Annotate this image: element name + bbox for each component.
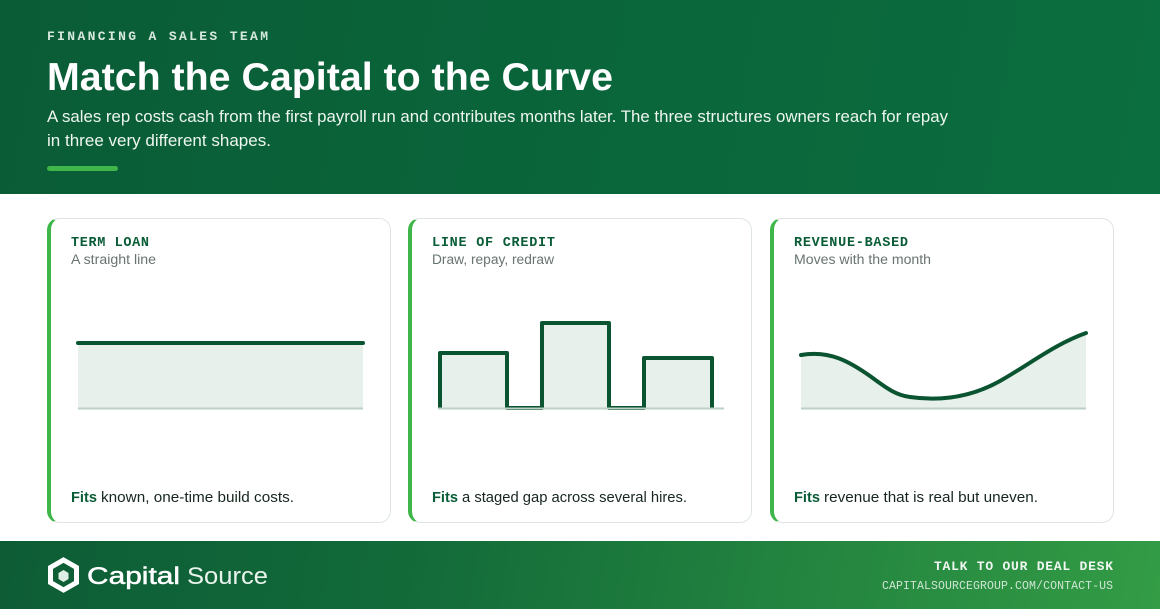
logo wordmark: Capital: [87, 563, 180, 590]
subtitle: A sales rep costs cash from the first payroll run and contributes months later. The three structures owners reach for repay: [47, 107, 948, 126]
card heading: TERM LOAN: [71, 236, 149, 251]
panel: term loan: [47, 218, 391, 523]
logo wordmark: [87, 563, 268, 590]
header band: [0, 0, 1160, 194]
title: Match the Capital to the Curve: [47, 56, 613, 99]
subtitle: [47, 107, 948, 150]
chart: revenue-linked curve: [801, 333, 1086, 408]
fit note: a staged gap across several hires.: [462, 490, 687, 506]
logo wordmark: Source: [187, 563, 268, 590]
card heading: LINE OF CREDIT: [432, 236, 555, 251]
icon: hexagon logo: [50, 560, 76, 590]
footer band: [0, 541, 1160, 609]
card subheading: Moves with the month: [794, 252, 931, 267]
eyebrow: FINANCING A SALES TEAM: [47, 29, 268, 44]
fit note: Fits: [794, 490, 820, 506]
panel: line of credit: [408, 218, 752, 523]
panel: revenue-based: [770, 218, 1114, 523]
fit note: Fits: [432, 490, 458, 506]
card subheading: Draw, repay, redraw: [432, 252, 554, 267]
subtitle: in three very different shapes.: [47, 131, 271, 150]
accent bar: [47, 166, 118, 171]
fit note: Fits: [71, 490, 97, 506]
chart: draw and repay steps: [438, 323, 724, 408]
card heading: REVENUE-BASED: [794, 236, 908, 251]
chart: flat repayment line: [78, 343, 363, 408]
card subheading: A straight line: [71, 252, 156, 267]
contact url: CAPITALSOURCEGROUP.COM/CONTACT-US: [882, 580, 1113, 593]
fit note: known, one-time build costs.: [101, 490, 294, 506]
contact heading: TALK TO OUR DEAL DESK: [934, 559, 1113, 574]
fit note: revenue that is real but uneven.: [824, 490, 1038, 506]
